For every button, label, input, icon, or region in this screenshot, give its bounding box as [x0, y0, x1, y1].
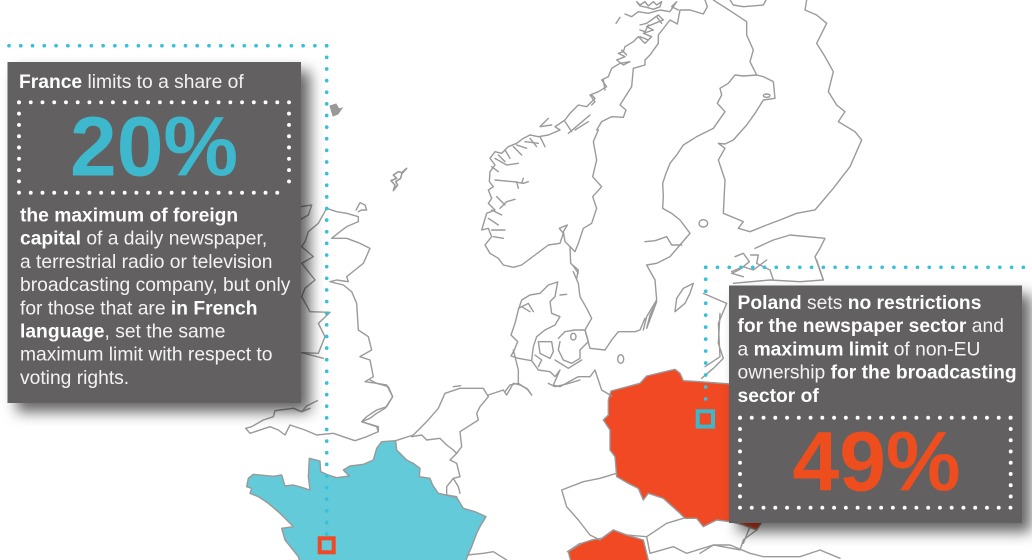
description text: for those that are in French: [20, 298, 258, 319]
panel: Poland: [729, 286, 1022, 523]
coastlines: Sweden and Finland: [645, 0, 862, 280]
description text: broadcasting company, but only: [20, 275, 291, 296]
coastlines: southern England and Low Countries: [246, 380, 580, 560]
description text: voting rights.: [20, 368, 129, 389]
dotted connector: France: [9, 46, 327, 544]
description text: sector of: [738, 386, 819, 407]
coastlines: Baltic states and Eastern Europe: [700, 260, 840, 558]
dotted frame: [19, 102, 289, 193]
description text: for the newspaper sector and: [738, 316, 1004, 337]
coastlines: central Norway: [530, 95, 595, 137]
description text: language, set the same: [20, 322, 225, 342]
marker: France: [320, 538, 334, 552]
coastlines: Baltic islands and Central Europe: [562, 280, 757, 553]
map of Europe: [246, 0, 862, 560]
description text: the maximum of foreign: [20, 206, 238, 226]
panel background: [729, 286, 1022, 523]
intro text: France limits to a share of: [19, 72, 244, 93]
description text: maximum limit with respect to: [20, 345, 272, 366]
marker: Poland: [698, 411, 713, 427]
description text: Poland sets no restrictions: [738, 293, 981, 314]
description text: capital of a daily newspaper,: [20, 229, 267, 250]
description text: ownership for the broadcasting: [738, 363, 1017, 384]
description text: a terrestrial radio or television: [20, 252, 272, 273]
statistic: 49%: 49%: [792, 414, 961, 508]
country: Austria: [568, 530, 648, 560]
coastlines: southern Norway: [482, 130, 602, 278]
statistic: 20%: 20%: [70, 100, 238, 194]
dotted frame: [740, 418, 1011, 508]
coastlines: northern Norway: [590, 0, 707, 130]
dotted connector: Poland: [706, 267, 1024, 399]
description text: a maximum limit of non-EU: [738, 339, 980, 360]
panel: France: [8, 62, 301, 403]
icon: Faroe Islands: [330, 104, 342, 116]
coastlines: British Isles: [301, 168, 407, 432]
country: Poland: [603, 369, 793, 530]
country: France: [247, 441, 486, 560]
coastlines: Denmark and southern Sweden: [505, 272, 645, 396]
panel background: [8, 62, 301, 403]
